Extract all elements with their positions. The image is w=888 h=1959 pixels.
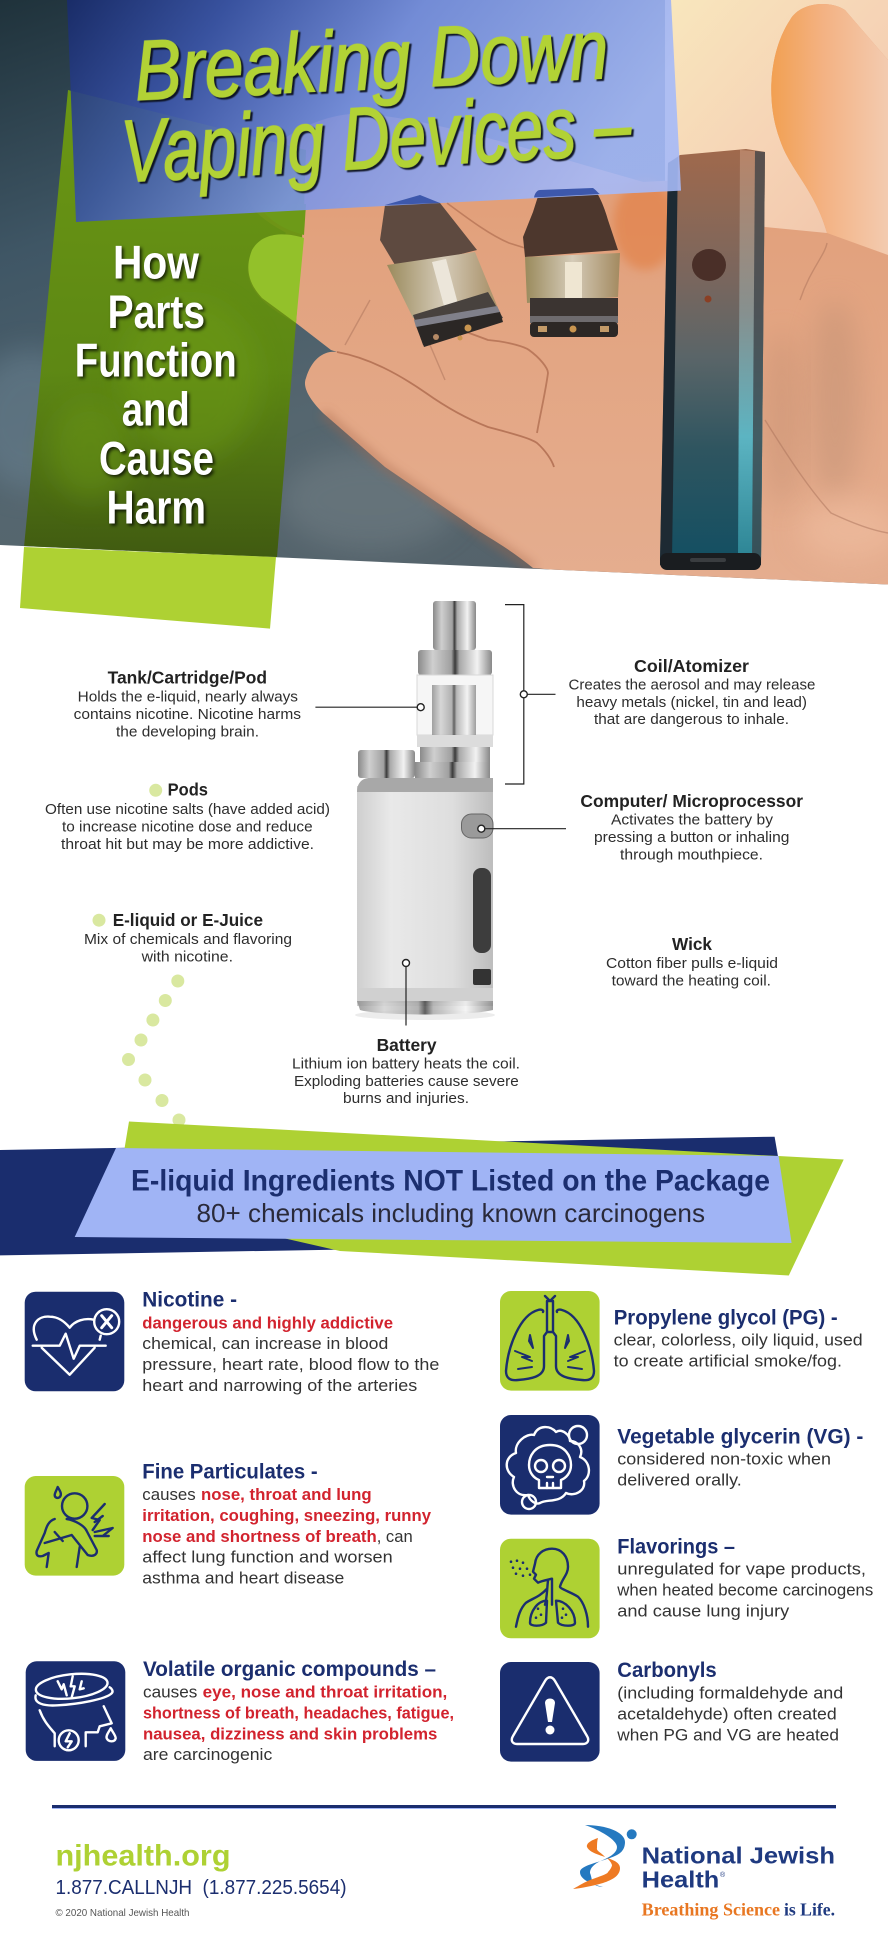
text: propylene glycol: to create artificial smoke/fog. <box>614 1351 842 1370</box>
footer contact <box>56 1840 346 1919</box>
text: vegetable glycerin: Vegetable glycerin (VG) - <box>617 1424 863 1448</box>
text: carbonyls: when PG and VG are heated <box>616 1725 839 1744</box>
label: coil: that are dangerous to inhale. <box>594 711 789 728</box>
callout leader: battery <box>402 960 410 1026</box>
label: battery <box>292 1035 520 1107</box>
label: wick <box>606 934 778 989</box>
icon: person coughing <box>25 1476 124 1576</box>
icon: lungs <box>500 1291 600 1391</box>
text: flavorings <box>616 1535 873 1621</box>
logo: National Jewish Health <box>573 1825 835 1920</box>
text: nicotine: chemical, can increase in blood <box>142 1334 388 1353</box>
text: vegetable glycerin: delivered orally. <box>617 1470 742 1489</box>
text: propylene glycol: clear, colorless, oily liquid, used <box>614 1330 863 1349</box>
callout leader: tank <box>315 704 424 711</box>
footer rule <box>52 1805 836 1809</box>
footer contact: © 2020 National Jewish Health <box>56 1907 190 1919</box>
text: carbonyls: acetaldehyde) often created <box>617 1704 837 1723</box>
label: battery: Lithium ion battery heats the coil. <box>292 1055 520 1072</box>
icon: head with headache <box>26 1661 125 1761</box>
logo: National Jewish Health: Breathing Science <box>642 1900 780 1920</box>
text: propylene glycol <box>614 1305 863 1370</box>
text: volatile organic compounds: shortness of breath, headaches, fatigue, <box>143 1703 454 1722</box>
icon: smoke cloud with skull <box>500 1415 600 1515</box>
pod right <box>523 188 620 337</box>
blue overlay panel <box>67 0 681 222</box>
hand <box>248 4 888 600</box>
text: volatile organic compounds: causes <box>143 1683 197 1702</box>
label: e-liquid: E-liquid or E-Juice <box>113 910 263 930</box>
label: e-liquid: with nicotine. <box>141 948 233 965</box>
text: fine particulates: Fine Particulates - <box>142 1459 318 1483</box>
subtitle: How <box>113 235 199 288</box>
label: battery: Exploding batteries cause severe <box>294 1073 519 1090</box>
title <box>119 2 634 201</box>
subtitle: and <box>122 383 190 436</box>
text: flavorings: when heated become carcinogens <box>616 1581 873 1600</box>
hero photo: hand holding vaping device and pods <box>0 0 888 600</box>
label: wick: toward the heating coil. <box>612 972 771 989</box>
text: volatile organic compounds: nausea, dizziness and skin problems <box>143 1724 437 1743</box>
label: computer: Computer/ Microprocessor <box>580 791 803 811</box>
text: volatile organic compounds: Volatile organic compounds – <box>143 1657 436 1681</box>
text: nicotine: dangerous and highly addictive <box>142 1313 393 1332</box>
device illustration: box mod vape <box>355 601 495 1020</box>
label: wick: Wick <box>672 934 712 954</box>
green fingertip <box>248 234 304 323</box>
label: pods: Pods <box>168 780 208 800</box>
pod left <box>380 195 503 347</box>
green strip under the photo <box>20 547 276 629</box>
palm shading <box>610 192 668 274</box>
callout bracket: coil <box>505 605 556 784</box>
banner: e-liquid ingredients <box>0 1122 844 1276</box>
finger creases <box>337 352 554 467</box>
label: battery: Battery <box>377 1035 437 1055</box>
label: tank: Tank/Cartridge/Pod <box>108 668 267 688</box>
text: carbonyls <box>616 1658 843 1744</box>
callout leader: computer <box>478 825 566 832</box>
text: volatile organic compounds: eye, nose and throat irritation, <box>203 1683 447 1702</box>
banner: e-liquid ingredients: E-liquid Ingredients NOT Listed on the Package <box>131 1165 770 1198</box>
label: coil: Creates the aerosol and may release <box>568 676 815 693</box>
icon: warning triangle <box>500 1662 600 1762</box>
text: flavorings: unregulated for vape products, <box>617 1560 866 1579</box>
label: tank: Holds the e-liquid, nearly always <box>78 688 298 705</box>
banner: e-liquid ingredients: 80+ chemicals including known carcinogens <box>196 1198 705 1228</box>
label: tank: contains nicotine. Nicotine harms <box>74 706 301 723</box>
green overlay panel <box>24 90 306 557</box>
text: carbonyls: Carbonyls <box>617 1658 717 1682</box>
label: coil: Coil/Atomizer <box>634 656 749 676</box>
footer contact: njhealth.org <box>56 1840 230 1873</box>
text: nicotine: Nicotine - <box>142 1288 237 1312</box>
label: e-liquid: Mix of chemicals and flavoring <box>84 931 292 948</box>
text: fine particulates <box>142 1459 432 1588</box>
label: tank: the developing brain. <box>116 723 259 740</box>
dotted path <box>122 974 186 1126</box>
label: computer: through mouthpiece. <box>620 846 763 864</box>
label: e-liquid <box>84 910 292 965</box>
subtitle: Function <box>75 334 237 387</box>
text: volatile organic compounds <box>143 1657 454 1764</box>
vape pen <box>660 149 765 570</box>
icon: airway and lungs <box>500 1539 600 1638</box>
label: pods: to increase nicotine dose and reduce <box>62 818 313 835</box>
footer contact: 1.877.CALLNJH (1.877.225.5654) <box>56 1877 346 1899</box>
text: volatile organic compounds: are carcinogenic <box>143 1745 273 1764</box>
text: fine particulates: , can <box>377 1527 413 1546</box>
label: computer: Activates the battery by <box>611 812 774 829</box>
icon: heart nicotine <box>25 1292 124 1391</box>
label: wick: Cotton fiber pulls e-liquid <box>606 955 778 972</box>
label: pods <box>45 780 330 853</box>
subtitle <box>75 235 237 534</box>
title: Vaping Devices – <box>119 74 634 201</box>
logo: National Jewish Health: ® <box>720 1871 726 1879</box>
text: nicotine: pressure, heart rate, blood flow to the <box>142 1355 439 1374</box>
text: propylene glycol: Propylene glycol (PG) - <box>614 1305 838 1329</box>
text: fine particulates: affect lung function and worsen <box>142 1548 393 1567</box>
label: coil <box>568 656 815 728</box>
text: nicotine <box>142 1288 439 1395</box>
subtitle: Cause <box>99 432 214 485</box>
label: computer <box>580 791 803 864</box>
text: fine particulates: irritation, coughing, sneezing, runny <box>142 1506 432 1525</box>
text: fine particulates: nose and shortness of breath <box>142 1527 377 1546</box>
text: carbonyls: (including formaldehyde and <box>617 1683 843 1702</box>
blue-tinted pod tops <box>385 195 440 205</box>
text: vegetable glycerin: considered non-toxic when <box>617 1449 831 1468</box>
text: flavorings: and cause lung injury <box>617 1602 790 1621</box>
text: fine particulates: asthma and heart disease <box>142 1569 344 1588</box>
text: flavorings: Flavorings – <box>617 1535 735 1559</box>
label: coil: heavy metals (nickel, tin and lead) <box>576 694 807 711</box>
title: Breaking Down <box>132 2 610 118</box>
label: battery: burns and injuries. <box>343 1090 469 1107</box>
logo: National Jewish Health: National Jewish <box>642 1842 835 1868</box>
text: vegetable glycerin <box>617 1424 863 1489</box>
subtitle: Harm <box>106 481 206 534</box>
text: fine particulates: nose, throat and lung <box>201 1485 372 1504</box>
label: pods: Often use nicotine salts (have added acid) <box>45 801 330 818</box>
label: computer: pressing a button or inhaling <box>594 829 789 846</box>
text: nicotine: heart and narrowing of the arteries <box>142 1376 417 1395</box>
label: tank <box>74 668 301 740</box>
label: pods: throat hit but may be more addictive. <box>61 836 314 853</box>
subtitle: Parts <box>108 285 205 338</box>
thumb <box>771 4 888 255</box>
index finger <box>258 114 642 232</box>
logo: National Jewish Health: is Life. <box>784 1900 835 1920</box>
text: fine particulates: causes <box>142 1485 196 1504</box>
logo: National Jewish Health: Health <box>642 1867 719 1893</box>
